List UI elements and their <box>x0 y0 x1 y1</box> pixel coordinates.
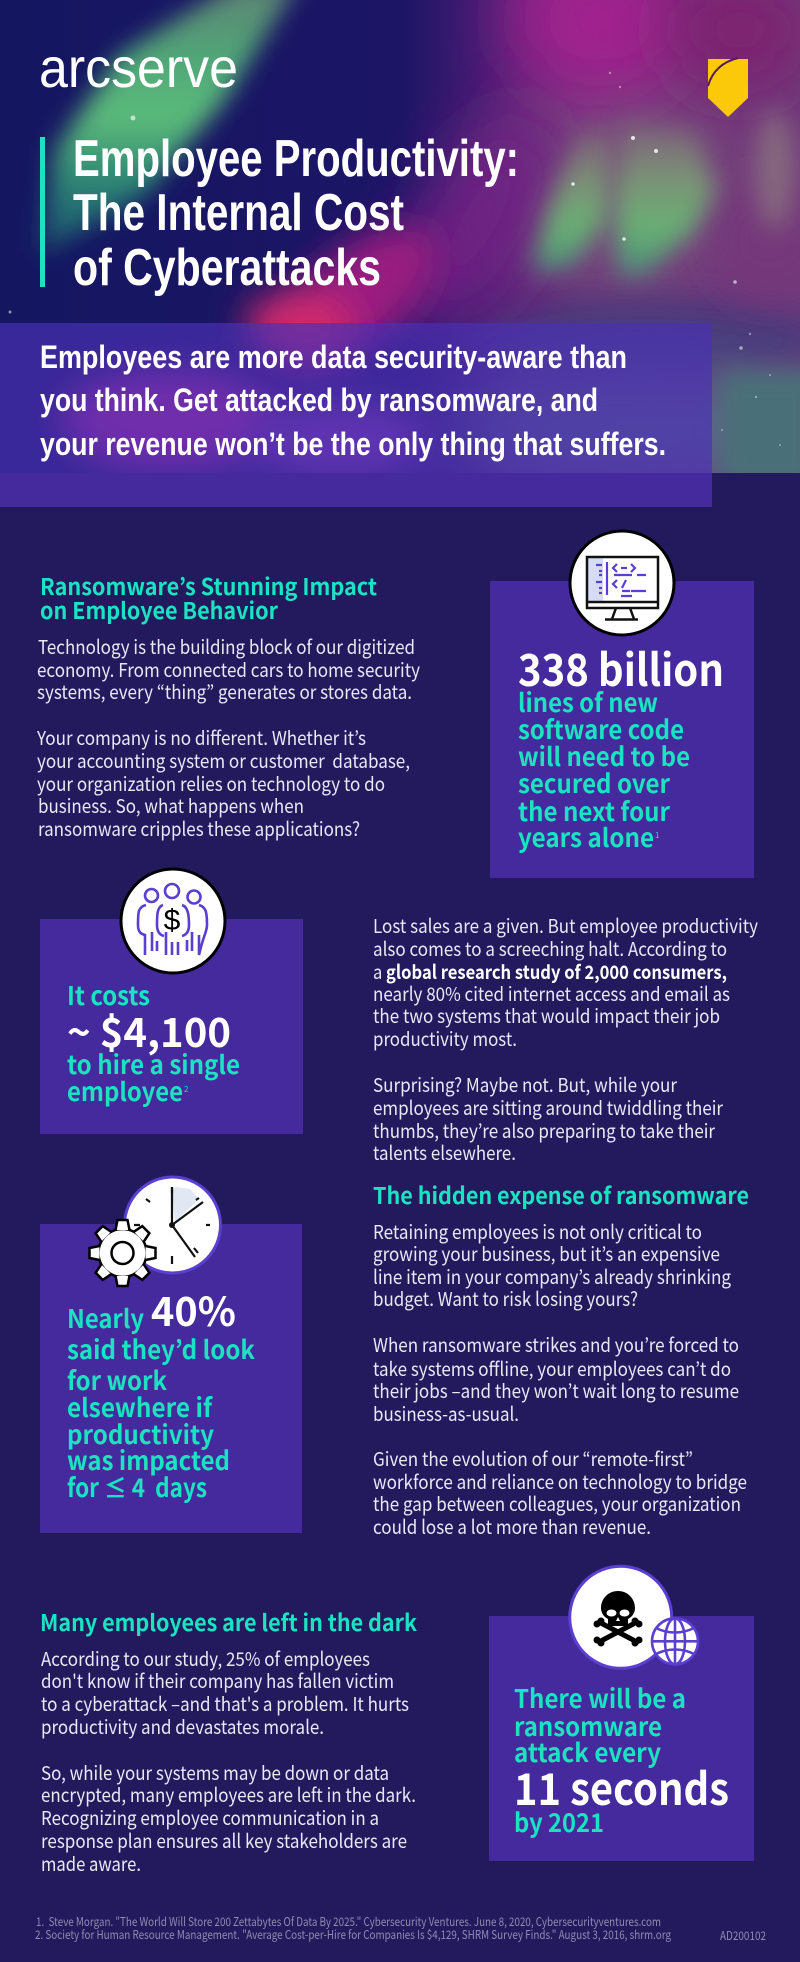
stat caption: the next four <box>518 792 671 829</box>
text block: our study: to a cyberattack –and that's a problem. It hurts <box>41 1690 409 1717</box>
text block: our study: encrypted, many employees are left in the dark. <box>41 1781 416 1808</box>
stat caption: 1 <box>655 830 659 841</box>
footnotes: 1. Steve Morgan. "The World Will Store 200 Zettabytes Of Data By 2025." Cybersecurity Ventures. June 8, 2020, Cybersecurityventures.com <box>36 1913 661 1930</box>
stat caption: lines of new <box>518 683 658 720</box>
stat: 338 billion: 338 billion <box>518 635 724 699</box>
stat: 11 seconds: 11 seconds <box>514 1754 729 1818</box>
text block: lost sales <box>373 912 758 1166</box>
text block: retaining employees: budget. Want to risk losing yours? <box>373 1285 638 1312</box>
text block: retaining employees: their jobs –and they won’t wait long to resume <box>373 1377 739 1404</box>
text block: lost sales: productivity most. <box>373 1025 517 1052</box>
text block: lost sales: talents elsewhere. <box>373 1139 516 1166</box>
text block: technology: your accounting system or customer database, <box>37 747 410 774</box>
stat: 40%: 40% <box>151 1280 236 1338</box>
panel: 11 seconds <box>489 1566 754 1861</box>
text block: lost sales: also comes to a screeching halt. According to <box>373 935 727 962</box>
text block: lost sales: Lost sales are a given. But employee productivity <box>373 912 758 939</box>
stat caption: years alone <box>518 818 654 855</box>
text block: our study: productivity and devastates morale. <box>41 1713 324 1740</box>
panel: nearly 40% <box>40 1177 302 1533</box>
caption: by 2021: by 2021 <box>514 1803 604 1840</box>
caption <box>514 1679 686 1770</box>
panel: cost to hire <box>40 869 303 1134</box>
text block: our study: According to our study, 25% of employees <box>41 1645 370 1672</box>
text block: retaining employees: Retaining employees is not only critical to <box>373 1218 702 1245</box>
icon: people and dollar: $ <box>164 904 181 937</box>
text block: retaining employees: When ransomware strikes and you’re forced to <box>373 1331 739 1358</box>
title <box>73 130 519 297</box>
text block: technology: economy. From connected cars to home security <box>37 656 420 683</box>
stat caption: to hire a single <box>67 1045 240 1082</box>
heading: left in the dark: Many employees are left in the dark <box>40 1604 417 1638</box>
text block: retaining employees <box>373 1218 747 1540</box>
caption: attack every <box>514 1733 661 1770</box>
footnotes <box>35 1913 671 1943</box>
heading: ransomware's stunning impact <box>40 568 377 626</box>
stat caption <box>67 1045 240 1109</box>
stat: $4,100: ~ $4,100 <box>67 1001 231 1059</box>
stat caption: productivity <box>67 1415 214 1452</box>
icon: people and dollar <box>121 869 225 973</box>
text block: lost sales: the two systems that would impact their job <box>373 1002 720 1029</box>
text block: our study: Recognizing employee communication in a <box>41 1804 379 1831</box>
text: nearly: Nearly <box>67 1299 144 1336</box>
title accent bar <box>40 137 45 287</box>
icon: clock <box>124 1177 220 1273</box>
text block: lost sales: employees are sitting around twiddling their <box>373 1094 724 1121</box>
text block: technology: your organization relies on technology to do <box>37 770 385 797</box>
text: it costs: It costs <box>67 976 150 1013</box>
stat caption: was impacted <box>67 1441 230 1478</box>
heading: ransomware's stunning impact: on Employee Behavior <box>40 592 279 626</box>
title: Employee Productivity: <box>73 130 519 188</box>
text block: retaining employees: Given the evolution of our “remote-first” <box>373 1445 693 1472</box>
text block: technology: Your company is no different. Whether it’s <box>36 724 366 751</box>
stat caption <box>67 1330 256 1505</box>
text block: retaining employees: the gap between colleagues, your organization <box>373 1490 741 1517</box>
text block: our study: made aware. <box>41 1850 141 1877</box>
text block: retaining employees: take systems offline, your employees can’t do <box>373 1355 731 1382</box>
text block: our study: don't know if their company has fallen victim <box>41 1667 394 1694</box>
intro band: Employees are more data security-aware than <box>40 339 627 375</box>
stat caption: for work <box>67 1361 168 1398</box>
stat caption: for ≤ 4 days <box>67 1468 207 1505</box>
stat caption: secured over <box>518 764 671 801</box>
footnotes: 2. Society for Human Resource Management. "Average Cost-per-Hire for Companies Is $4,129, SHRM Survey Finds." August 3, 2016, shrm.org <box>35 1926 671 1943</box>
logo: arcserve: arcserve <box>39 36 238 99</box>
intro band: you think. Get attacked by ransomware, and <box>40 382 598 418</box>
text block: retaining employees: could lose a lot more than revenue. <box>373 1513 651 1540</box>
heading: hidden expense: The hidden expense of ransomware <box>373 1177 749 1211</box>
icon: yellow shield logo <box>708 58 748 117</box>
text block: our study: response plan ensures all key stakeholders are <box>41 1827 407 1854</box>
text block: lost sales: Surprising? Maybe not. But, while your <box>373 1071 678 1098</box>
text block: technology: systems, every “thing” generates or stores data. <box>37 678 412 705</box>
text block: lost sales: thumbs, they’re also preparing to take their <box>373 1117 716 1144</box>
text block: retaining employees: growing your business, but it’s an expensive <box>373 1240 720 1267</box>
stat caption: said they’d look <box>67 1330 256 1367</box>
title: of Cyberattacks <box>73 239 381 297</box>
stat caption: elsewhere if <box>67 1388 213 1425</box>
document code: AD200102 <box>720 1927 766 1944</box>
stat caption: 2 <box>184 1084 189 1095</box>
heading: ransomware's stunning impact: Ransomware’s Stunning Impact <box>40 568 377 602</box>
icon: gear <box>90 1220 156 1286</box>
icon: code monitor <box>570 531 674 635</box>
hero aurora image <box>0 0 800 490</box>
icon: globe <box>652 1618 698 1664</box>
icon: skull and crossbones <box>570 1566 672 1668</box>
stat caption: employee <box>67 1072 183 1109</box>
text block: our study <box>41 1645 416 1877</box>
stat caption: software code <box>518 710 684 747</box>
text block: lost sales: nearly 80% cited internet access and email as <box>373 980 730 1007</box>
stat caption: will need to be <box>518 737 690 774</box>
text block: retaining employees: business-as-usual. <box>373 1400 519 1427</box>
text block: our study: So, while your systems may be down or data <box>41 1759 389 1786</box>
intro band <box>0 323 712 507</box>
stat caption <box>518 683 690 855</box>
text block: retaining employees: workforce and reliance on technology to bridge <box>373 1468 747 1495</box>
caption: There will be a <box>514 1679 686 1716</box>
panel: 338 billion <box>490 531 754 878</box>
title: The Internal Cost <box>73 184 404 242</box>
text block: technology: Technology is the building block of our digitized <box>38 633 415 660</box>
intro band: your revenue won’t be the only thing that suffers. <box>40 426 666 462</box>
text block: lost sales: a global research study of 2,000 consumers, <box>373 958 727 985</box>
text block: technology: ransomware cripples these applications? <box>38 815 360 842</box>
text block: technology: business. So, what happens when <box>38 792 304 819</box>
caption: ransomware <box>514 1707 662 1744</box>
text block: retaining employees: line item in your company’s already shrinking <box>373 1263 731 1290</box>
text block: technology <box>36 633 420 842</box>
